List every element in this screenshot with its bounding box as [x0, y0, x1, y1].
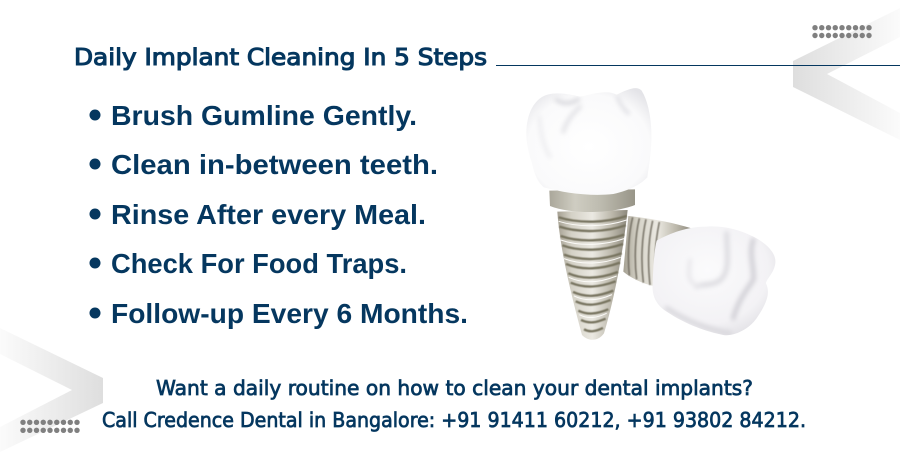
decoration: top right dot grid: [812, 25, 872, 38]
title rule: [496, 65, 900, 66]
call to action: [102, 376, 806, 432]
upright crown: [526, 88, 651, 195]
decoration: top right chevron: [793, 8, 900, 140]
step 3: Rinse After every Meal.: [111, 199, 426, 230]
upright screw: [557, 210, 628, 340]
illustration: dental implants: [526, 88, 775, 340]
decoration: bottom left chevron: [0, 328, 103, 452]
title: Daily Implant Cleaning In 5 Steps: [74, 45, 487, 71]
call to action line 1: Want a daily routine on how to clean your dental implants?: [156, 376, 753, 400]
step 1: Brush Gumline Gently.: [111, 100, 417, 131]
decoration: bottom left dot grid: [20, 420, 80, 433]
upright collar: [549, 189, 635, 212]
call to action line 2: Call Credence Dental in Bangalore: +91 91411 60212, +91 93802 84212.: [102, 408, 806, 432]
lying implant screw: [623, 216, 692, 287]
lying crown: [653, 226, 775, 335]
step 2: Clean in-between teeth.: [111, 149, 438, 180]
list: cleaning steps: [90, 100, 468, 329]
step 5: Follow-up Every 6 Months.: [111, 298, 468, 329]
step 4: Check For Food Traps.: [111, 248, 407, 279]
